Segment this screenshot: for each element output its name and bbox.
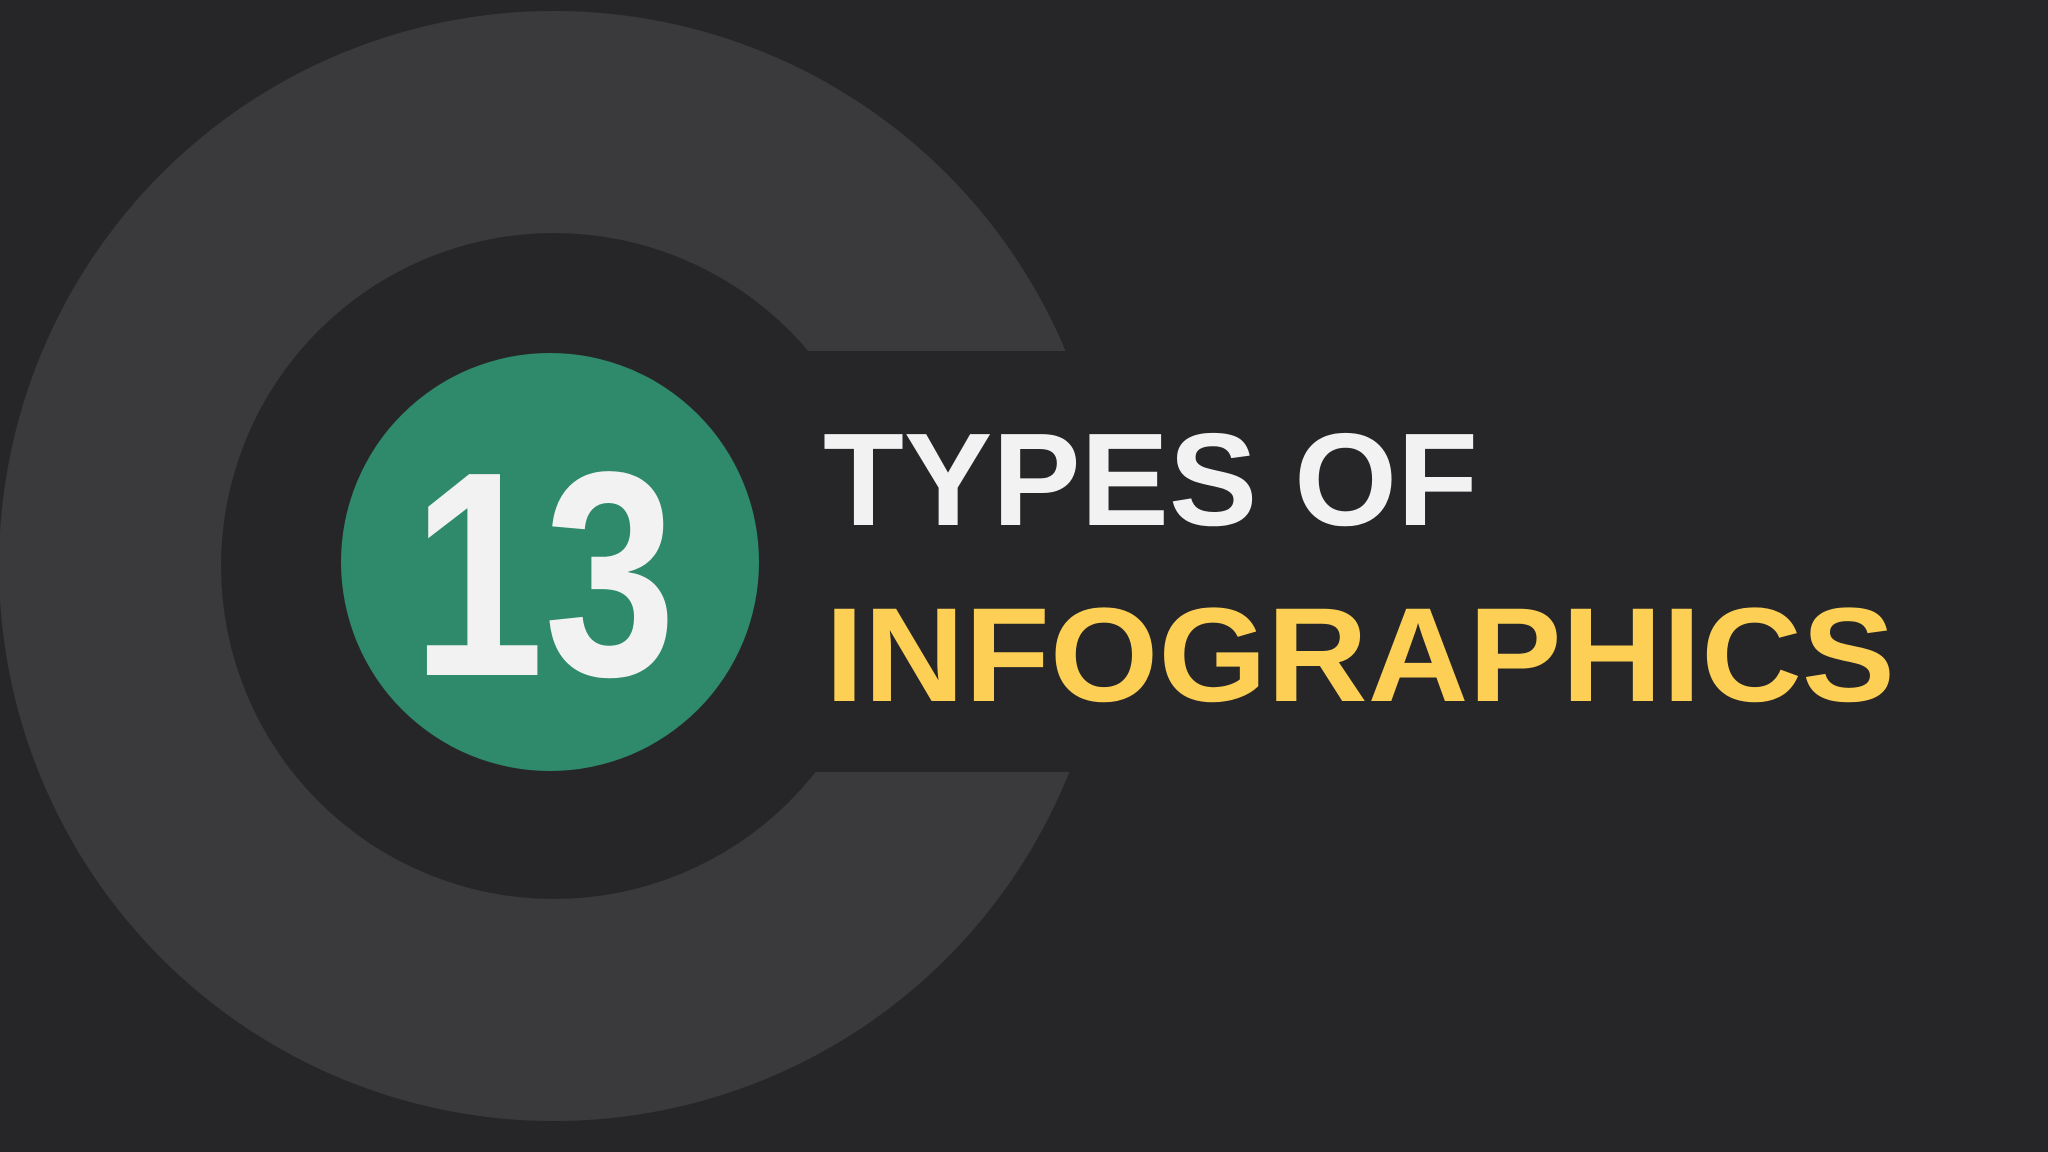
number 13: 13 bbox=[412, 411, 676, 737]
title line 1: TYPES OF bbox=[823, 406, 1478, 553]
green circle badge with number 13 bbox=[341, 353, 759, 771]
title line 2: INFOGRAPHICS bbox=[825, 581, 1895, 730]
